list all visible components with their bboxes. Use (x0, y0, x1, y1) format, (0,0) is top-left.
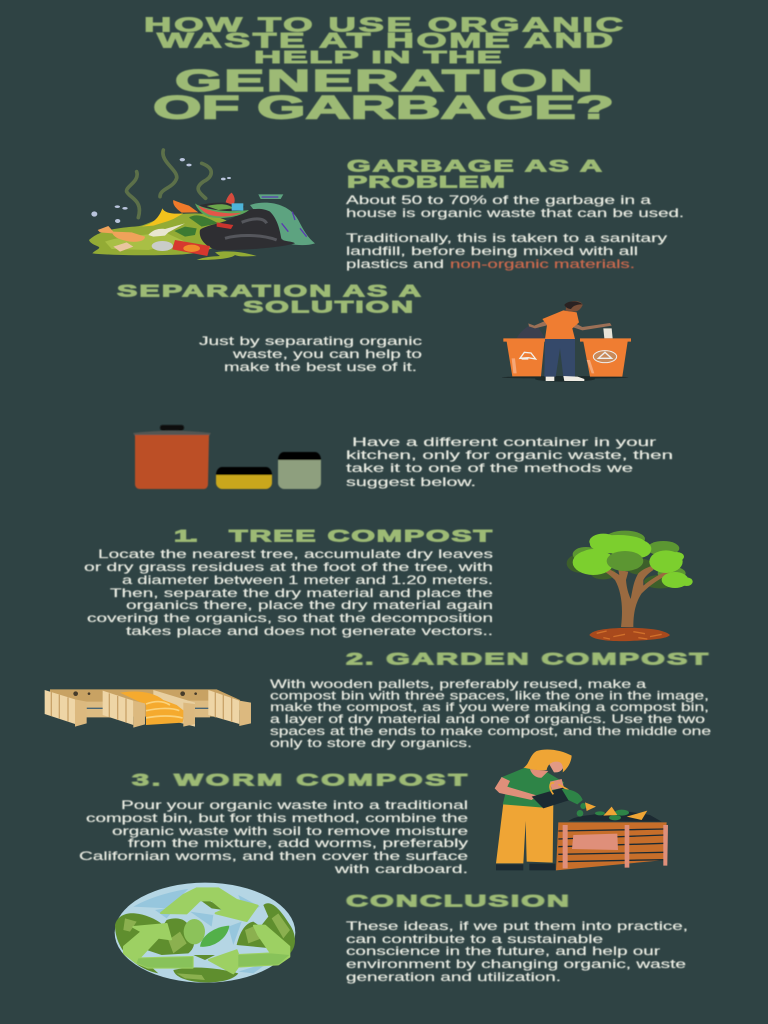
text block: garbage problem: About 50 to 70% of the garbage in a (346, 194, 652, 207)
text block: worm compost: with cardboard. (333, 863, 468, 876)
text block: worm compost: Californian worms, and then cover the surface (79, 850, 468, 863)
text block: garden compost: compost bin with three spaces, like the one in the image, (270, 690, 709, 702)
heading: garbage as a problem (347, 157, 602, 192)
text block: garden compost: a layer of dry material and one of organics. Use the two (270, 713, 705, 726)
text block: garbage problem: plastics and (346, 258, 444, 271)
text block: worm compost: compost bin, but for this method, combine the (86, 812, 468, 825)
text block: separation: waste, you can help to (231, 348, 422, 361)
text block: kitchen container: take it to one of the methods we (346, 462, 633, 475)
text block: conclusion: environment by changing organic, waste (346, 958, 686, 971)
heading: separation as a solution (117, 282, 421, 317)
text block: worm compost: Pour your organic waste into a traditional (121, 799, 468, 812)
title: HOW TO USE ORGANIC (144, 13, 623, 36)
text block: tree compost: takes place and does not generate vectors.. (126, 625, 493, 638)
icon: kitchen containers (133, 425, 321, 489)
text block: tree compost: or dry grass residues at the foot of the tree, with (84, 561, 493, 574)
text block: tree compost: Locate the nearest tree, accumulate dry leaves (98, 548, 493, 561)
heading: tree compost: TREE COMPOST (229, 527, 492, 546)
text block: tree compost: Then, separate the dry material and place the (110, 587, 493, 600)
icon: garbage pile (89, 150, 315, 260)
icon: recycling globe (115, 883, 295, 983)
text block: tree compost: a diameter between 1 meter and 1.20 meters. (122, 574, 493, 587)
text block: garbage problem: Traditionally, this is taken to a sanitary (346, 232, 667, 245)
text block: worm compost (79, 799, 468, 876)
text block: separation: Just by separating organic (199, 335, 422, 348)
heading: garbage as a problem: GARBAGE AS A (347, 157, 602, 176)
text block: garbage problem: non-organic materials. (450, 258, 635, 271)
text block: conclusion: These ideas, if we put them into practice, (346, 920, 688, 933)
icon: tree with mulch (567, 531, 693, 641)
text block: worm compost: from the mixture, add worms, preferably (128, 837, 468, 850)
text block: conclusion: conscience in the future, and help our (346, 945, 660, 958)
text block: separation: make the best use of it. (224, 361, 417, 374)
heading: separation as a solution: SOLUTION (243, 298, 413, 317)
text block: tree compost: organics there, place the dry material again (126, 599, 493, 612)
title: WASTE AT HOME AND (157, 29, 613, 52)
text block: kitchen container: kitchen, only for organic waste, then (346, 449, 673, 462)
text block: conclusion: can contribute to a sustainable (346, 933, 603, 946)
text block: garbage problem (346, 194, 684, 271)
text block: conclusion: generation and utilization. (346, 971, 561, 984)
icon: wooden pallet compost bin (45, 689, 251, 728)
heading: garden compost: 2. GARDEN COMPOST (346, 650, 708, 669)
text block: tree compost (84, 548, 493, 638)
icon: person sorting waste into bins (502, 301, 631, 382)
text block: tree compost: covering the organics, so that the decomposition (87, 612, 493, 625)
text block: garden compost: With wooden pallets, preferably reused, make a (270, 678, 647, 691)
text block: garbage problem: landfill, before being mixed with all (346, 245, 638, 258)
text block: garden compost (270, 678, 711, 750)
text block: kitchen container: suggest below. (346, 476, 476, 489)
title (144, 13, 623, 126)
heading: tree compost: 1. (174, 527, 198, 546)
heading: worm compost: 3. WORM COMPOST (132, 771, 467, 790)
title: GENERATION (175, 64, 593, 98)
text block: conclusion (346, 920, 688, 984)
text block: garden compost: make the compost, as if you were making a compost bin, (270, 701, 709, 714)
title: HELP IN THE (254, 47, 502, 67)
text block: garden compost: only to store dry organics. (270, 737, 472, 750)
heading: separation as a solution: SEPARATION AS A (117, 282, 421, 301)
title: OF GARBAGE? (153, 89, 614, 126)
text block: separation (199, 335, 422, 374)
text block: kitchen container (346, 436, 673, 489)
heading: garbage as a problem: PROBLEM (347, 173, 505, 192)
icon: woman adding waste to worm compost bin (495, 749, 668, 870)
text block: kitchen container: Have a different container in your (352, 436, 656, 449)
text block: garden compost: spaces at the ends to make compost, and the middle one (270, 725, 711, 738)
text block: worm compost: organic waste with soil to remove moisture (112, 825, 468, 838)
heading: conclusion: CONCLUSION (346, 892, 569, 911)
text block: garbage problem: house is organic waste that can be used. (346, 207, 684, 220)
